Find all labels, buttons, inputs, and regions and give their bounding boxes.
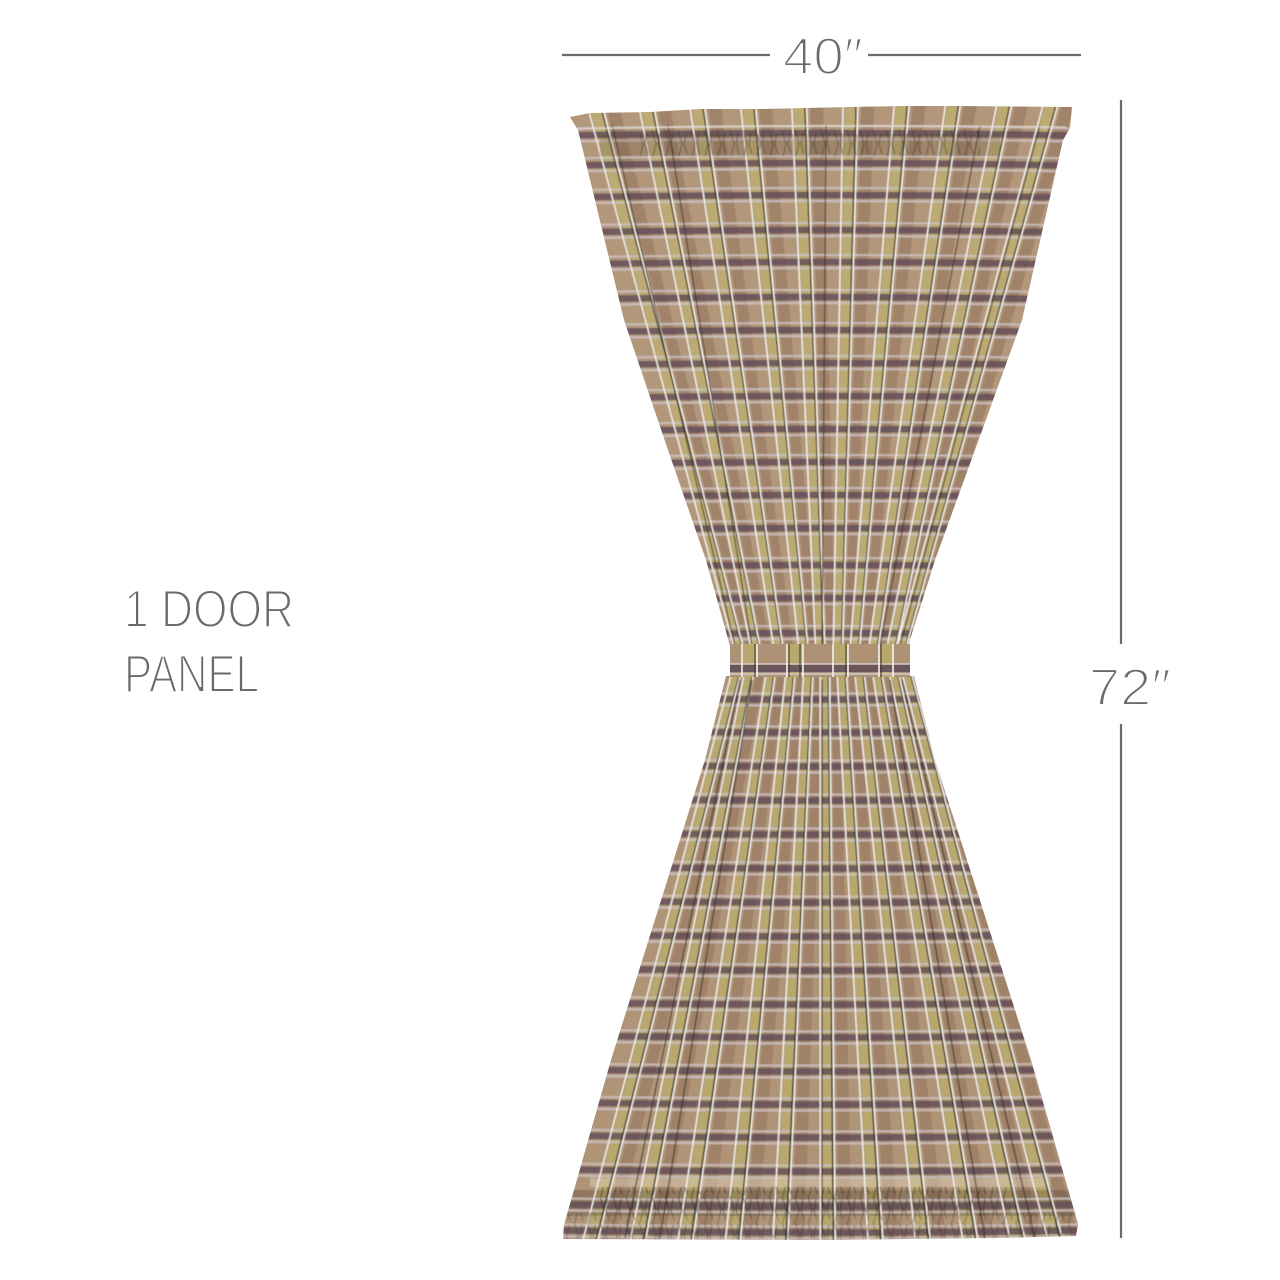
curtain upper section <box>570 106 1072 646</box>
tie-back band <box>730 644 910 677</box>
height dimension: 72 inches: 72″ <box>1089 659 1171 717</box>
label: 1 door panel: PANEL <box>124 645 259 704</box>
label: 1 door panel <box>124 580 294 704</box>
width dimension: 40 inches: 40″ <box>783 28 863 86</box>
curtain lower section <box>563 676 1078 1240</box>
label: 1 door panel: 1 DOOR <box>124 580 294 639</box>
